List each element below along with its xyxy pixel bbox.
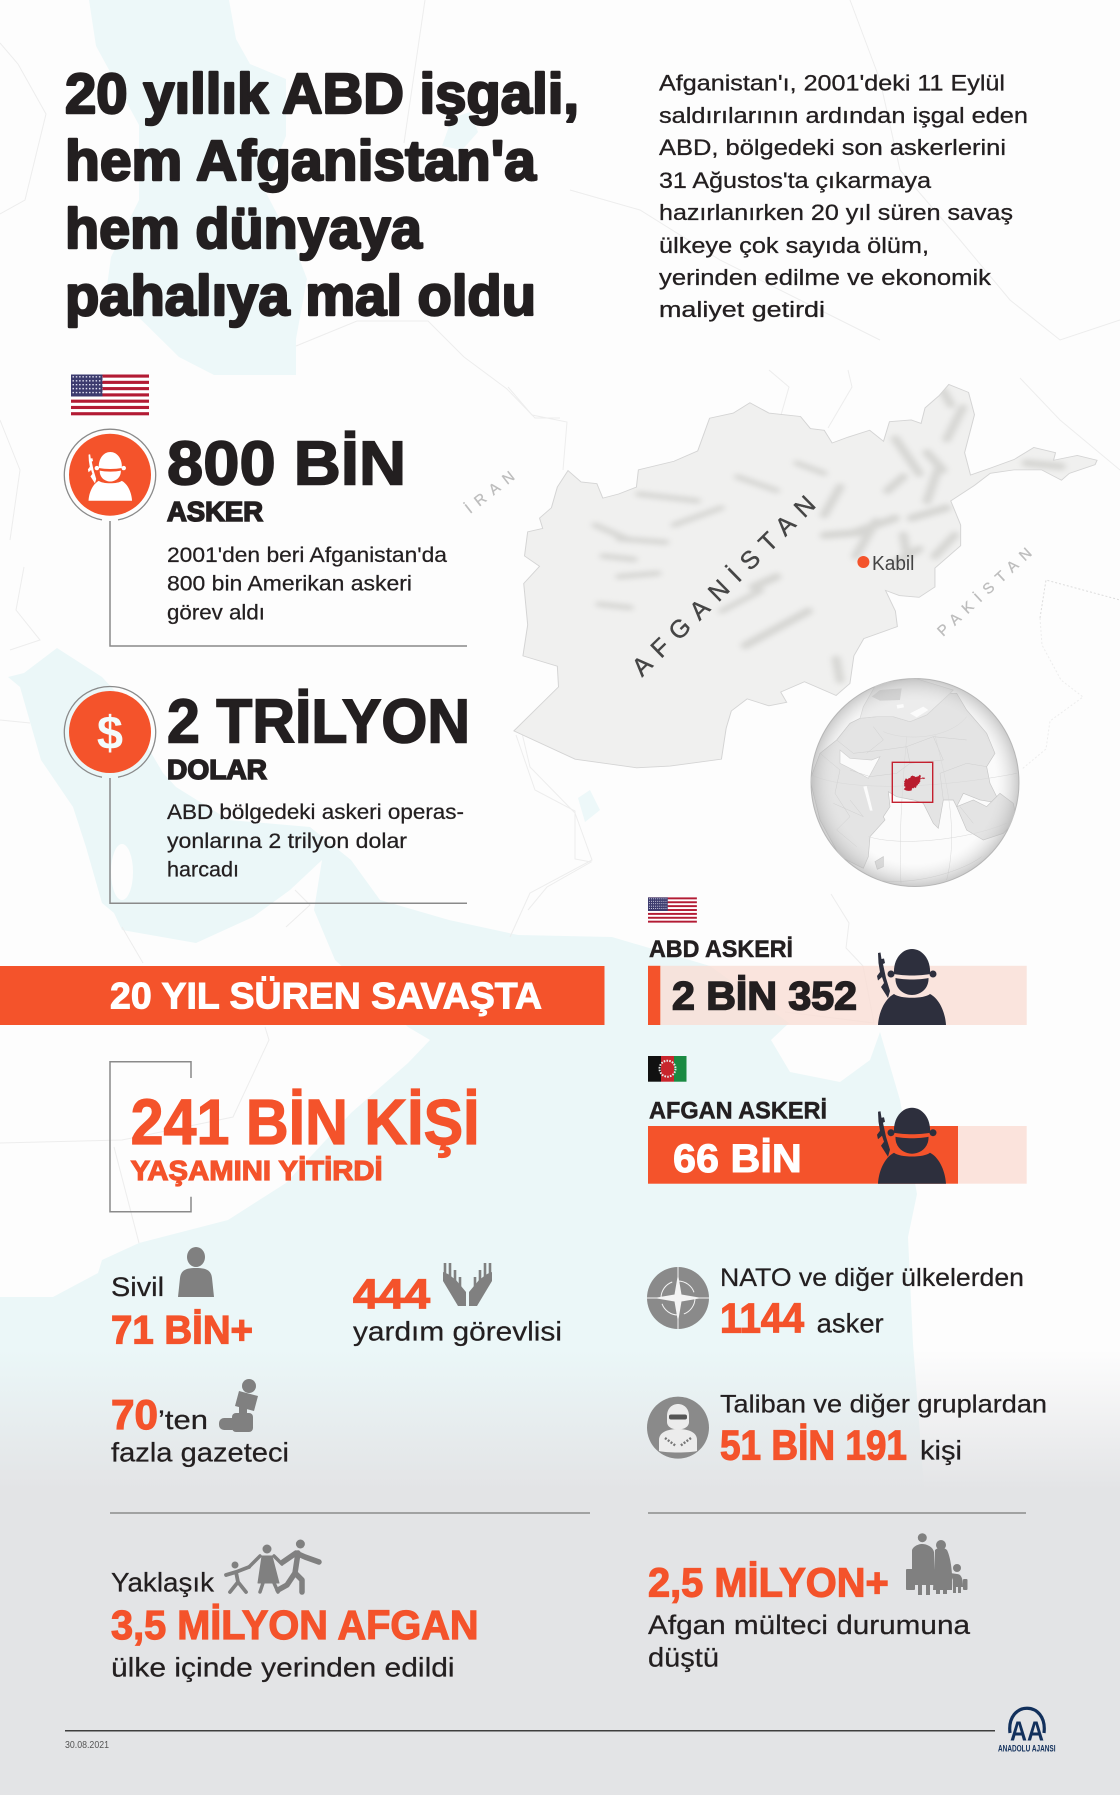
label: dolar: DOLAR bbox=[167, 754, 267, 785]
panel: aid workers: 444 bbox=[353, 1271, 431, 1318]
intro text: maliyet getirdi bbox=[659, 297, 825, 322]
panel: Taliban: 51 BİN 191 bbox=[720, 1421, 907, 1468]
icon: NATO bbox=[647, 1267, 709, 1329]
panel: Afghan soldiers bbox=[648, 1056, 1027, 1184]
logo: Anadolu Ajansi: AA bbox=[1010, 1716, 1044, 1747]
panel: 2 trilyon dolar bbox=[64, 687, 470, 903]
title bbox=[65, 62, 579, 328]
panel: journalists: fazla gazeteci bbox=[111, 1437, 289, 1467]
icon: soldier bbox=[877, 949, 946, 1025]
bar bbox=[648, 966, 1027, 1025]
intro text: ülkeye çok sayıda ölüm, bbox=[659, 233, 929, 258]
footer rule bbox=[65, 1730, 995, 1732]
intro text: ABD, bölgedeki son askerlerini bbox=[659, 135, 1006, 160]
stat: 800 bin: 800 BİN bbox=[167, 430, 406, 499]
panel: Afghan soldiers: 66 BİN bbox=[673, 1137, 802, 1181]
panel: journalists: ’ten bbox=[158, 1405, 208, 1435]
connector line bbox=[110, 778, 467, 903]
bar bbox=[648, 1126, 1027, 1184]
description: yonlarına 2 trilyon dolar bbox=[167, 830, 407, 853]
panel: NATO bbox=[647, 1264, 1024, 1342]
icon: walking family bbox=[226, 1540, 319, 1592]
panel: US soldiers: ABD ASKERİ bbox=[649, 936, 793, 963]
icon: Afghan flag bbox=[648, 1056, 686, 1082]
icon: hands bbox=[443, 1263, 492, 1306]
panel: NATO: 1144 bbox=[720, 1295, 805, 1342]
locator box bbox=[892, 762, 933, 802]
panel: 241 bin kişi bbox=[110, 1062, 480, 1212]
divider right bbox=[648, 1512, 1026, 1514]
panel: civilians: 71 BİN+ bbox=[111, 1309, 253, 1353]
description bbox=[167, 544, 447, 624]
panel: internally displaced: Yaklaşık bbox=[111, 1567, 215, 1597]
icon: masked fighter bbox=[647, 1397, 709, 1459]
panel: refugees: düştü bbox=[648, 1643, 719, 1673]
panel: civilians: Sivil bbox=[111, 1272, 164, 1302]
label: asker: ASKER bbox=[167, 496, 263, 527]
description: 800 bin Amerikan askeri bbox=[167, 573, 412, 596]
panel: NATO: NATO ve diğer ülkelerden bbox=[720, 1264, 1024, 1292]
icon: US flag large bbox=[71, 374, 149, 415]
connector line bbox=[110, 521, 467, 646]
description: görev aldı bbox=[167, 601, 265, 624]
icon: soldier badge bbox=[64, 429, 156, 520]
panel: aid workers bbox=[353, 1263, 562, 1347]
map: Afghanistan bbox=[514, 384, 1097, 768]
icon: person bbox=[178, 1247, 214, 1297]
title: hem dünyaya bbox=[65, 197, 423, 261]
title: pahalıya mal oldu bbox=[65, 264, 536, 328]
panel: journalists bbox=[111, 1379, 289, 1467]
description: ABD bölgedeki askeri operas- bbox=[167, 801, 464, 824]
intro text: 31 Ağustos'ta çıkarmaya bbox=[659, 168, 932, 193]
panel: 800 bin asker bbox=[64, 429, 467, 646]
label: Iran: İRAN bbox=[461, 467, 518, 517]
logo: Anadolu Ajansi: ANADOLU AJANSI bbox=[998, 1744, 1056, 1755]
banner: 20 yıl süren savaşta: 20 YIL SÜREN SAVAŞTA bbox=[110, 975, 542, 1016]
description: 2001'den beri Afganistan'da bbox=[167, 544, 447, 567]
panel: Taliban: kişi bbox=[920, 1435, 962, 1465]
logo: Anadolu Ajansi bbox=[998, 1708, 1056, 1755]
intro text: yerinden edilme ve ekonomik bbox=[659, 265, 992, 290]
city: Kabil: Kabil bbox=[872, 553, 914, 575]
panel: internally displaced: 3,5 MİLYON AFGAN bbox=[111, 1602, 479, 1648]
intro text: Afganistan'ı, 2001'deki 11 Eylül bbox=[659, 70, 1005, 96]
panel: refugees: Afgan mülteci durumuna bbox=[648, 1610, 971, 1640]
bracket bbox=[110, 1062, 191, 1212]
stat: 241 bin kişi: 241 BİN KİŞİ bbox=[131, 1086, 480, 1158]
intro text bbox=[659, 70, 1028, 322]
panel: Afghan soldiers: AFGAN ASKERİ bbox=[649, 1097, 827, 1124]
icon: microphone bbox=[219, 1379, 258, 1432]
panel: journalists: 70 bbox=[111, 1391, 158, 1438]
panel: US soldiers: 2 BİN 352 bbox=[672, 975, 857, 1019]
icon: dollar badge: $ bbox=[97, 706, 123, 759]
panel: refugees bbox=[648, 1533, 971, 1673]
intro text: hazırlanırken 20 yıl süren savaş bbox=[659, 200, 1013, 225]
title: hem Afganistan'a bbox=[65, 129, 537, 193]
label: Pakistan: PAKİSTAN bbox=[934, 544, 1035, 640]
panel: aid workers: yardım görevlisi bbox=[353, 1317, 562, 1347]
country label: AFGANİSTAN bbox=[626, 490, 821, 682]
description bbox=[167, 801, 464, 882]
icon: refugee family bbox=[906, 1533, 968, 1595]
stat: 2 trilyon: 2 TRİLYON bbox=[167, 688, 470, 757]
caption: YAŞAMINI YİTİRDİ bbox=[131, 1155, 383, 1186]
panel: internally displaced: ülke içinde yerinden edildi bbox=[111, 1652, 455, 1682]
panel: Taliban: Taliban ve diğer gruplardan bbox=[720, 1391, 1047, 1419]
locator globe bbox=[810, 678, 1019, 886]
panel: internally displaced bbox=[111, 1540, 479, 1682]
icon: dollar badge bbox=[64, 687, 156, 777]
icon: soldier bbox=[877, 1108, 946, 1184]
intro text: saldırılarının ardından işgal eden bbox=[659, 103, 1028, 128]
panel: US soldiers bbox=[648, 897, 1027, 1025]
description: harcadı bbox=[167, 858, 239, 882]
panel: refugees: 2,5 MİLYON+ bbox=[648, 1560, 889, 1606]
panel: NATO: asker bbox=[817, 1309, 884, 1339]
Afghanistan highlight bbox=[904, 775, 925, 791]
date: 30.08.2021 bbox=[65, 1740, 109, 1751]
title: 20 yıllık ABD işgali, bbox=[65, 62, 579, 126]
panel: civilians bbox=[111, 1247, 253, 1353]
divider left bbox=[110, 1512, 590, 1514]
banner: 20 yıl süren savaşta bbox=[0, 966, 604, 1025]
icon: US flag small bbox=[648, 897, 697, 923]
panel: Taliban bbox=[647, 1391, 1047, 1468]
